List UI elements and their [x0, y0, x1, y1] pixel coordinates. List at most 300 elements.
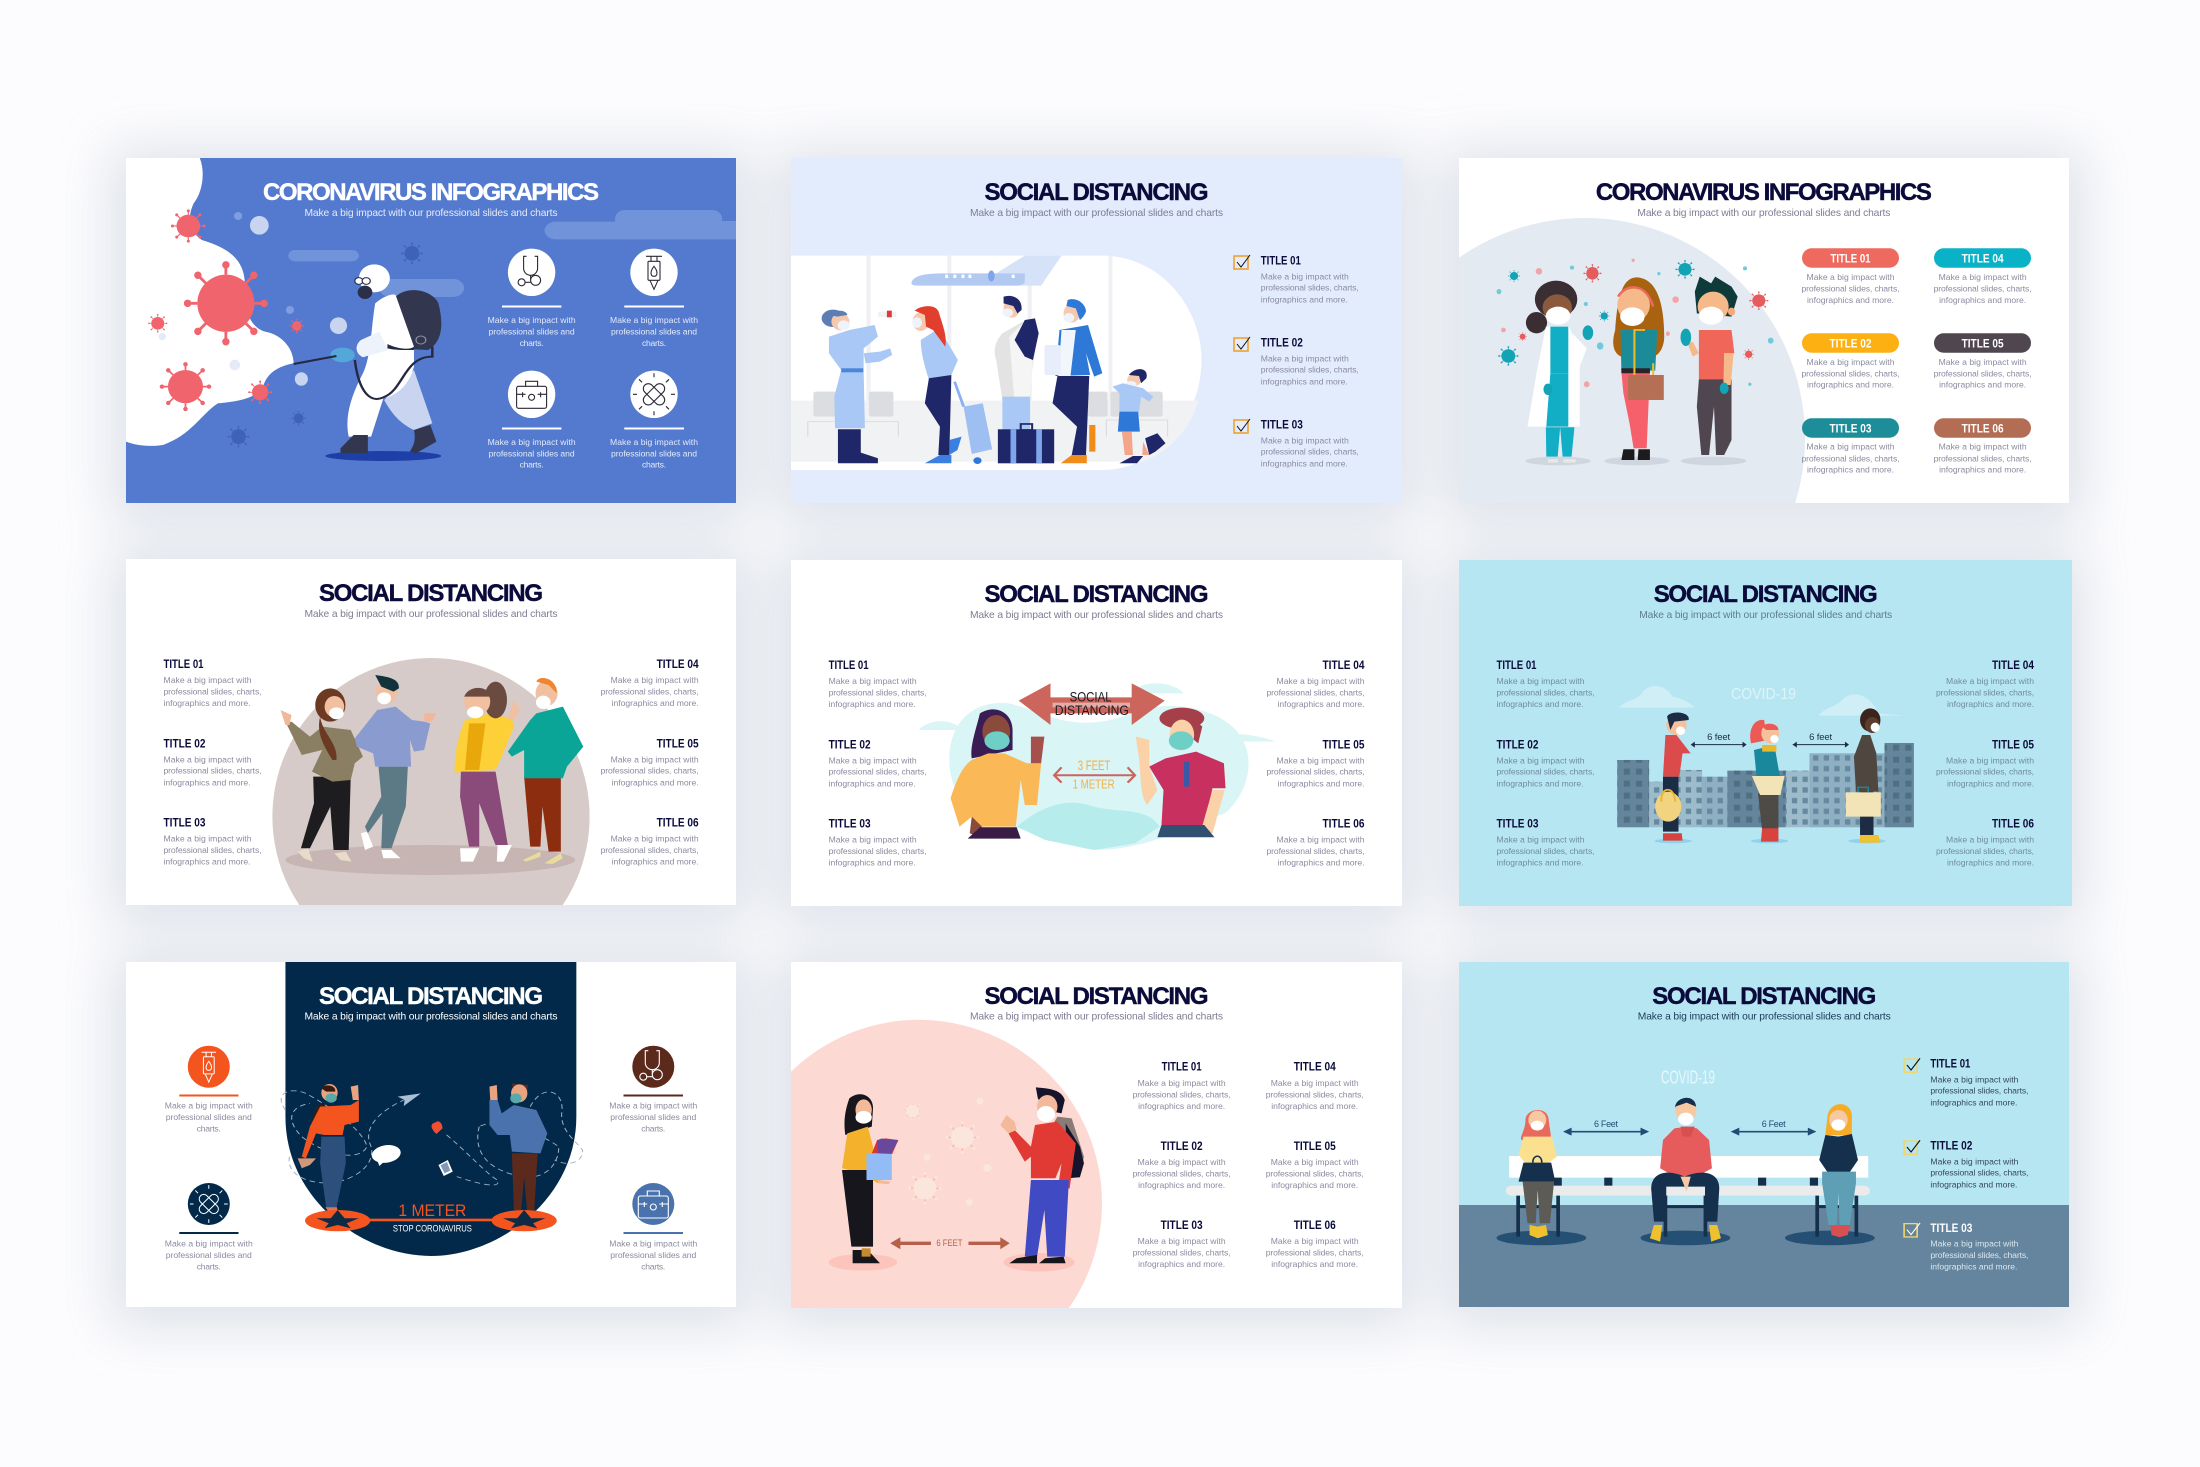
distance labels [1073, 757, 1115, 792]
man [1036, 1087, 1065, 1113]
text block: title 04: Make a big impact with [1271, 1078, 1359, 1088]
text block: item 2: charts. [197, 1262, 221, 1272]
woman [844, 1094, 873, 1135]
slide background [1459, 560, 2072, 906]
subheading: Make a big impact with our professional slides and charts [304, 609, 558, 620]
doctor [1526, 312, 1547, 333]
text block: title 04: infographics and more. [612, 698, 699, 708]
text block: title 01 [829, 658, 927, 709]
text block: title 05: TITLE 05 [657, 736, 699, 750]
text block: title 03 [1496, 817, 1594, 868]
text block: title 02 [1930, 1139, 2028, 1189]
text block: title 03: TITLE 03 [829, 817, 871, 831]
panel: social distancing airport slide [791, 158, 1402, 503]
text block: title 01: TITLE 01 [164, 657, 204, 671]
illustration: four friends in masks [281, 675, 583, 875]
text block: title 03: infographics and more. [1807, 465, 1894, 475]
panel: social distancing city slide [1459, 560, 2072, 906]
text block: title 05 [1266, 1139, 1364, 1190]
text block: title 03: professional slides, charts, [829, 846, 927, 856]
text block: title 05: TITLE 05 [1294, 1139, 1336, 1153]
subheading: Make a big impact with our professional slides and charts [970, 1012, 1223, 1023]
illustration: two people three feet apart [919, 683, 1276, 850]
text block: title 05: infographics and more. [1271, 1180, 1358, 1190]
label: title 01: TITLE 01 [1830, 251, 1871, 265]
text block: title 05: TITLE 05 [1322, 737, 1365, 751]
text block: title 05: professional slides, charts, [1266, 767, 1364, 777]
text block: title 02 [1133, 1139, 1231, 1190]
icon: pills [630, 371, 678, 418]
label: title 05: TITLE 05 [1962, 336, 2004, 350]
text block: title 02 [1261, 335, 1359, 386]
text block: title 01: professional slides, charts, [1261, 283, 1359, 293]
text block: title 02: Make a big impact with [1138, 1157, 1226, 1167]
text block: title 03 [1261, 417, 1359, 468]
person 1 [829, 325, 878, 428]
text block: title 05: infographics and more. [1947, 778, 2034, 788]
label: title 03: TITLE 03 [1830, 421, 1872, 435]
text block: title 03: professional slides, charts, [1930, 1250, 2028, 1260]
text block: title 03: infographics and more. [829, 858, 916, 868]
text block: item 1 [165, 1101, 253, 1133]
text block: title 01: infographics and more. [1807, 295, 1894, 305]
text block: title 05: professional slides, charts, [1934, 368, 2032, 378]
floor markers [367, 1219, 494, 1221]
illustration: three people on a bench [1497, 1058, 1920, 1245]
social distancing double arrow [1019, 683, 1165, 725]
text block: item 3 [488, 439, 576, 468]
text block: title 01: infographics and more. [1496, 699, 1584, 709]
person center [1675, 1098, 1696, 1113]
text block: title 04 [1266, 1060, 1364, 1111]
text block: title 06: TITLE 06 [1992, 817, 2034, 831]
text block: title 06: Make a big impact with [1939, 442, 2027, 452]
text block: title 06: infographics and more. [1947, 858, 2034, 868]
woman yellow jacket [460, 772, 508, 847]
checkbox icons [1904, 1058, 1920, 1237]
illustration: doctor and two people in masks [1497, 259, 1774, 465]
text block: item 2: professional slides and [166, 1250, 252, 1260]
text block: title 01: professional slides, charts, [1930, 1086, 2028, 1096]
text block: title 06 [1934, 442, 2032, 475]
arrow caption [1055, 689, 1129, 718]
text block: title 02: infographics and more. [1496, 778, 1584, 788]
text block: title 04: Make a big impact with [611, 675, 699, 685]
text block: item 3: Make a big impact with [609, 1101, 698, 1111]
text block: title 06: TITLE 06 [1294, 1218, 1336, 1232]
text block: item 1: Make a big impact with [165, 1101, 253, 1111]
text block: title 06: infographics and more. [612, 857, 699, 867]
person 2 [1750, 720, 1768, 743]
text block: title 06: TITLE 06 [657, 816, 699, 830]
person 4 [1064, 306, 1079, 323]
text block: title 05: professional slides, charts, [601, 766, 699, 776]
text block: item 3: charts. [641, 1123, 665, 1133]
subheading: Make a big impact with our professional slides and charts [970, 208, 1223, 219]
text block: title 05 [601, 736, 699, 787]
distance label 2: 6 Feet [1762, 1119, 1786, 1129]
background circle [272, 658, 590, 975]
text block: title 04 [1934, 272, 2032, 305]
heading: SOCIAL DISTANCING [984, 983, 1208, 1010]
text block: title 06 [601, 816, 699, 867]
text block: title 01: Make a big impact with [164, 675, 252, 685]
text block: title 04: professional slides, charts, [601, 686, 699, 696]
heading: SOCIAL DISTANCING [984, 581, 1208, 608]
text block: title 06: professional slides, charts, [601, 845, 699, 855]
text block: title 04: infographics and more. [1278, 699, 1364, 709]
panel: social distancing four friends slide [126, 559, 736, 975]
slide background [791, 962, 1402, 1308]
text block: title 03: professional slides, charts, [1496, 846, 1594, 856]
subheading: Make a big impact with our professional slides and charts [1637, 208, 1890, 219]
person 1 [1663, 777, 1678, 832]
label: title 02: TITLE 02 [1830, 336, 1872, 350]
text block: title 02: Make a big impact with [164, 754, 252, 764]
text block: title 05: professional slides, charts, [1266, 1168, 1364, 1178]
icon: stethoscope [632, 1046, 674, 1088]
slide background [791, 158, 1402, 503]
distance label 1: 6 feet [1707, 732, 1730, 743]
text block: title 03: Make a big impact with [1261, 435, 1349, 445]
text block: item 2 [165, 1239, 253, 1272]
text block: title 01: infographics and more. [1930, 1097, 2017, 1107]
text block: title 05: infographics and more. [1278, 778, 1364, 788]
text block: item 4: professional slides and [611, 448, 697, 458]
text block: title 06: TITLE 06 [1322, 817, 1365, 831]
text block: item 2: charts. [642, 338, 666, 348]
text block: title 03 [1930, 1221, 2028, 1272]
text block: title 03: TITLE 03 [164, 816, 206, 830]
text block: title 02 [1496, 737, 1594, 788]
heading: SOCIAL DISTANCING [319, 580, 543, 607]
checkbox icon 3 [1234, 419, 1250, 433]
text block: title 05: TITLE 05 [1992, 737, 2034, 751]
distance label 2: 6 feet [1809, 732, 1832, 743]
slide background [1459, 158, 2069, 503]
text block: title 02: professional slides, charts, [1261, 365, 1359, 375]
text block: title 01: professional slides, charts, [829, 687, 927, 697]
text block: title 03 [1802, 442, 1900, 475]
text block: title 06: Make a big impact with [1271, 1236, 1359, 1246]
text block: title 01 [1802, 272, 1900, 305]
text block: title 02: professional slides, charts, [1930, 1168, 2028, 1178]
text block: item 2: Make a big impact with [165, 1239, 253, 1249]
text block: title 03: TITLE 03 [1261, 417, 1303, 431]
text block: title 02: Make a big impact with [1806, 357, 1895, 367]
text block: title 01: TITLE 01 [1496, 658, 1537, 672]
panel: social distancing navy slide [126, 962, 736, 1307]
text block: title 05 [1934, 357, 2032, 390]
text block: title 01: infographics and more. [164, 698, 250, 708]
text block: item 2 [610, 317, 698, 346]
text block: title 04: TITLE 04 [1294, 1060, 1336, 1074]
text block: title 04 [1266, 658, 1365, 709]
text block: title 02: TITLE 02 [1496, 737, 1539, 751]
text block: title 05: Make a big impact with [1271, 1157, 1359, 1167]
distance arrows [1568, 1129, 1811, 1134]
text block: title 02: Make a big impact with [1261, 353, 1349, 363]
text block: title 01: TITLE 01 [829, 658, 869, 672]
slide background [126, 962, 736, 1307]
heading: SOCIAL DISTANCING [1654, 581, 1878, 608]
label: title 01 [1802, 248, 1899, 268]
text block: title 04: professional slides, charts, [1266, 687, 1364, 697]
illustration: three people queueing in a city [1617, 686, 1914, 843]
illustration: two people one meter apart [281, 962, 582, 1256]
man [1159, 708, 1204, 729]
panel: social distancing pink slide [736, 962, 1402, 1386]
text block: title 03: TITLE 03 [1930, 1221, 1973, 1235]
text block: title 06: professional slides, charts, [1266, 846, 1364, 856]
label: title 02 [1802, 333, 1899, 353]
man blue jacket [365, 767, 408, 848]
covid label: COVID-19 [1731, 686, 1796, 703]
text block: title 01: professional slides, charts, [1133, 1089, 1231, 1099]
text block: title 06: Make a big impact with [611, 834, 699, 844]
woman [971, 709, 1013, 758]
text block: title 01 [1261, 253, 1359, 304]
text block: title 03: TITLE 03 [1496, 817, 1539, 831]
illustration: worker disinfecting viruses [126, 158, 738, 461]
label: title 04 [1934, 248, 2031, 268]
text block: item 1: Make a big impact with [488, 315, 576, 325]
text block: title 01 [164, 657, 262, 708]
icon: stethoscope [508, 249, 555, 296]
text block: title 05: Make a big impact with [611, 754, 699, 764]
text block: title 02 [829, 737, 927, 788]
text block: title 06: professional slides, charts, [1934, 453, 2032, 463]
text block: title 03: Make a big impact with [1138, 1236, 1226, 1246]
woman [310, 1103, 326, 1130]
text block: title 01 [1133, 1060, 1231, 1111]
text block: title 03: infographics and more. [1930, 1262, 2017, 1272]
text block: title 05: infographics and more. [1939, 380, 2026, 390]
distance labels: 1 METER [1073, 777, 1115, 792]
text block: title 03: infographics and more. [1496, 858, 1584, 868]
distance arrows [1693, 743, 1848, 746]
text block: item 1: professional slides and [166, 1112, 252, 1122]
text block: title 06: Make a big impact with [1946, 835, 2034, 845]
text block: title 04: TITLE 04 [1992, 658, 2034, 672]
text block: title 02: professional slides, charts, [164, 766, 262, 776]
text block: title 04: infographics and more. [1271, 1101, 1358, 1111]
text block: title 06: professional slides, charts, [1266, 1247, 1364, 1257]
text block: item 3: charts. [520, 460, 544, 470]
text block: title 03: professional slides, charts, [1802, 453, 1900, 463]
text block: title 02: infographics and more. [1930, 1179, 2017, 1189]
text block: title 02: TITLE 02 [829, 737, 871, 751]
text block: item 4 [610, 439, 698, 468]
panel: coronavirus infographics blue slide [126, 158, 738, 503]
text block: title 01 [1930, 1057, 2028, 1107]
woman olive jacket [301, 777, 351, 850]
slide background [126, 559, 736, 905]
text block: item 3: Make a big impact with [488, 437, 576, 447]
subheading: Make a big impact with our professional slides and charts [304, 1012, 558, 1023]
man [1695, 277, 1738, 317]
text block: title 05: infographics and more. [612, 777, 699, 787]
subheading: Make a big impact with our professional slides and charts [970, 610, 1223, 621]
meter label: 1 METER [398, 1201, 466, 1220]
text block: title 03 [164, 816, 262, 867]
floor [1459, 1205, 2069, 1307]
icon: syringe [188, 1046, 230, 1088]
text block: title 03: Make a big impact with [164, 834, 252, 844]
panel: social distancing arrow slide [791, 560, 1402, 906]
background circle [1365, 218, 1805, 658]
label: title 06: TITLE 06 [1962, 421, 2004, 435]
subheading: Make a big impact with our professional slides and charts [304, 208, 558, 219]
text block: title 04: TITLE 04 [657, 657, 699, 671]
text block: item 4: charts. [642, 460, 666, 470]
text block: title 02: infographics and more. [164, 777, 250, 787]
person 3 [1860, 708, 1880, 732]
illustration: airport queue [791, 256, 1201, 470]
text block: title 02: TITLE 02 [1930, 1139, 1973, 1153]
text block: title 06 [1266, 817, 1365, 868]
text block: title 02 [1802, 357, 1900, 390]
text block: title 04: infographics and more. [1947, 699, 2034, 709]
man [512, 1083, 528, 1097]
text block: title 03: Make a big impact with [1930, 1239, 2019, 1249]
background circle [736, 1020, 1102, 1386]
text block: title 03: professional slides, charts, [164, 845, 262, 855]
text block: item 1: professional slides and [489, 326, 575, 336]
text block: item 4 [609, 1239, 698, 1272]
panel: coronavirus infographics white slide [1365, 158, 2069, 658]
child [1127, 374, 1141, 386]
text block: title 02: TITLE 02 [164, 736, 206, 750]
person 2 [921, 328, 958, 380]
text block: title 06 [1936, 817, 2034, 868]
man green hoodie [524, 777, 561, 852]
text block: title 01: professional slides, charts, [164, 686, 262, 696]
text block: item 4: professional slides and [610, 1250, 697, 1260]
text block: title 02: TITLE 02 [1261, 335, 1303, 349]
text block: item 1 [488, 317, 576, 346]
label: title 06 [1934, 418, 2031, 438]
text block: title 02 [164, 736, 262, 787]
stop coronavirus label: STOP CORONAVIRUS [393, 1224, 472, 1234]
text block: title 01: TITLE 01 [1162, 1060, 1202, 1074]
text block: title 06 [1266, 1218, 1364, 1269]
icon: pills [188, 1183, 230, 1225]
woman [1613, 277, 1664, 357]
text block: title 02: infographics and more. [1261, 376, 1348, 386]
person left [1521, 1110, 1551, 1140]
label: title 04: TITLE 04 [1962, 251, 2004, 265]
text block: title 02: Make a big impact with [1496, 755, 1585, 765]
slide background [1459, 962, 2069, 1307]
text block: item 3 [609, 1101, 698, 1133]
text block: title 03: infographics and more. [1261, 458, 1348, 468]
person right [1825, 1104, 1852, 1135]
checkbox icon 1 [1234, 255, 1250, 269]
text block: title 01: TITLE 01 [1930, 1057, 1971, 1071]
icon: briefcase [508, 371, 555, 418]
text block: item 3: professional slides and [489, 448, 575, 458]
text block: title 04: professional slides, charts, [1266, 1089, 1364, 1099]
text block: item 2: professional slides and [611, 326, 697, 336]
distance label 1: 6 Feet [1594, 1119, 1618, 1129]
text block: title 05: Make a big impact with [1946, 755, 2034, 765]
text block: title 02: Make a big impact with [829, 755, 917, 765]
label: title 03 [1802, 418, 1899, 438]
text block: title 05: Make a big impact with [1939, 357, 2027, 367]
text block: title 01 [1496, 658, 1594, 709]
text block: title 02: Make a big impact with [1930, 1156, 2019, 1166]
illustration: two people six feet apart [829, 1087, 1084, 1272]
slide background [126, 158, 736, 503]
text block: item 2: Make a big impact with [610, 315, 698, 325]
heading: CORONAVIRUS INFOGRAPHICS [263, 179, 599, 206]
text block: title 03: Make a big impact with [1806, 442, 1895, 452]
text block: title 04: Make a big impact with [1946, 676, 2034, 686]
text block: title 02: infographics and more. [829, 778, 916, 788]
text block: title 04: professional slides, charts, [1936, 687, 2034, 697]
text block: title 02: TITLE 02 [1161, 1139, 1203, 1153]
text block: title 01: infographics and more. [1261, 294, 1348, 304]
panel: social distancing bench slide [1459, 962, 2069, 1307]
distance arrows [890, 1237, 1010, 1249]
text block: title 04 [601, 657, 699, 708]
text block: item 1: charts. [197, 1123, 221, 1133]
text block: title 05 [1936, 737, 2034, 788]
checkbox icon 2 [1234, 337, 1250, 351]
soft shadows behind slides [112, 150, 2083, 1326]
text block: title 01: Make a big impact with [829, 676, 917, 686]
text block: title 03 [1133, 1218, 1231, 1269]
subheading: Make a big impact with our professional slides and charts [1639, 610, 1892, 621]
icon: briefcase [632, 1183, 674, 1225]
text block: title 02: infographics and more. [1807, 380, 1894, 390]
text block: title 02: professional slides, charts, [1496, 767, 1594, 777]
text block: title 01: TITLE 01 [1261, 253, 1301, 267]
text block: title 04: Make a big impact with [1939, 272, 2027, 282]
person 3 [1004, 304, 1020, 318]
icon: syringe [630, 249, 678, 296]
heading: SOCIAL DISTANCING [319, 983, 543, 1010]
text block: title 04 [1936, 658, 2034, 709]
text block: title 03: Make a big impact with [829, 835, 917, 845]
text block: title 03: infographics and more. [164, 857, 250, 867]
text block: title 02: professional slides, charts, [1802, 368, 1900, 378]
text block: title 01: professional slides, charts, [1802, 283, 1900, 293]
text block: title 01: Make a big impact with [1806, 272, 1895, 282]
text block: title 06: infographics and more. [1271, 1259, 1358, 1269]
text block: title 06: professional slides, charts, [1936, 846, 2034, 856]
text block: title 01: professional slides, charts, [1496, 687, 1594, 697]
arrow caption: DISTANCING [1055, 702, 1129, 718]
text block: item 4: charts. [641, 1262, 665, 1272]
text block: title 02: infographics and more. [1138, 1180, 1225, 1190]
arrow caption: SOCIAL [1070, 689, 1112, 705]
slide background [791, 560, 1402, 906]
text block: title 05: Make a big impact with [1276, 755, 1365, 765]
text block: title 06: infographics and more. [1939, 465, 2026, 475]
text block: item 4: Make a big impact with [610, 437, 698, 447]
text block: item 1: charts. [520, 338, 544, 348]
text block: title 04: Make a big impact with [1276, 676, 1365, 686]
text block: title 01: Make a big impact with [1496, 676, 1585, 686]
text block: title 01: infographics and more. [829, 699, 916, 709]
distance labels: 3 FEET [1078, 757, 1111, 773]
subheading: Make a big impact with our professional slides and charts [1638, 1012, 1891, 1023]
text block: title 06: Make a big impact with [1276, 835, 1365, 845]
text block: title 03: TITLE 03 [1161, 1218, 1203, 1232]
text block: title 03: infographics and more. [1138, 1259, 1225, 1269]
